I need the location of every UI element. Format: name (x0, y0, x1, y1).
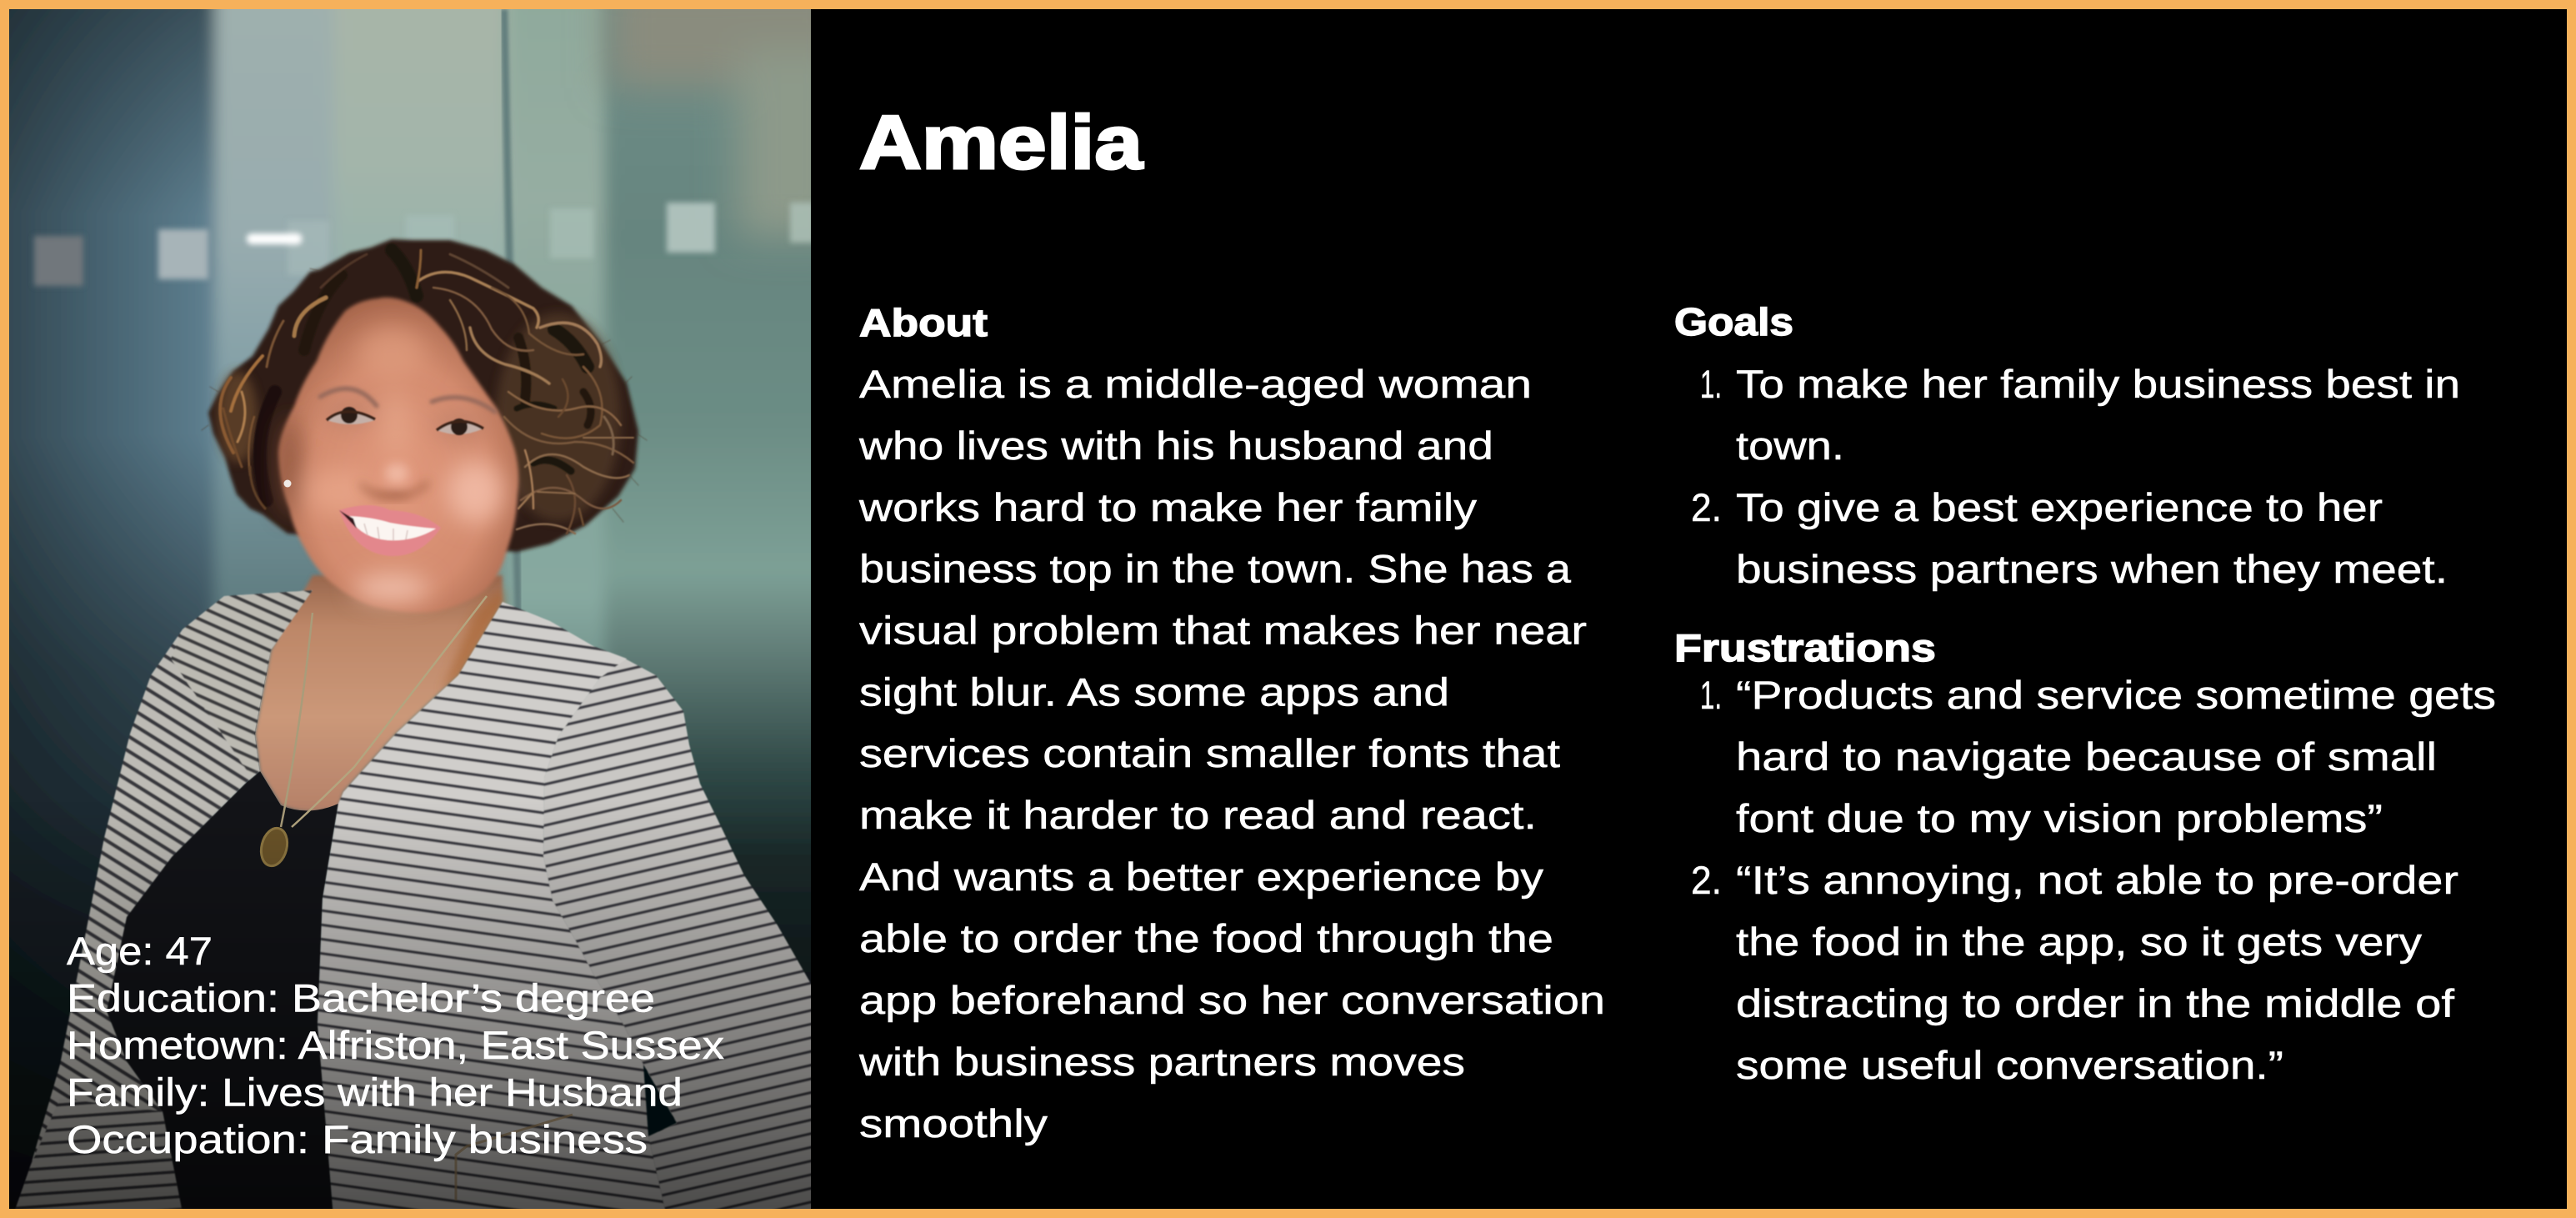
about heading: About (859, 301, 988, 344)
goal 1: To make her family business best in (1736, 362, 2460, 406)
right eye (437, 419, 483, 435)
goal 1 (1700, 362, 2460, 468)
jacket front panel (318, 602, 677, 1217)
jacket left side (32, 592, 285, 1162)
gap between arm and torso (643, 1065, 677, 1136)
demographic details on the photo: Hometown: Alfriston, East Sussex (67, 1023, 724, 1067)
about paragraph: who lives with his husband and (858, 424, 1493, 468)
frustration 1 (1700, 673, 2496, 840)
demographic details on the photo (67, 929, 724, 1161)
jacket right sleeve (543, 659, 825, 1217)
frustration 2: distracting to order in the middle of (1736, 981, 2455, 1025)
goals heading: Goals (1674, 300, 1793, 343)
demographic details on the photo: Occupation: Family business (67, 1117, 648, 1161)
demographic details on the photo: Family: Lives with her Husband (67, 1070, 683, 1114)
about paragraph: And wants a better experience by (859, 855, 1544, 899)
frustration 2: the food in the app, so it gets very (1736, 920, 2423, 964)
about paragraph: sight blur. As some apps and (859, 670, 1449, 714)
title: Amelia (859, 101, 1144, 185)
about paragraph: make it harder to read and react. (859, 793, 1537, 837)
frustration 2: some useful conversation.” (1736, 1043, 2283, 1087)
left eye (327, 407, 375, 424)
dark gradient at the bottom of the photo (9, 800, 811, 1209)
photo panel: portrait of Amelia (0, 0, 850, 1218)
glass frame line (504, 9, 518, 617)
blurred office glass background (0, 0, 838, 1218)
neck and chest skin (255, 575, 503, 812)
jacket pocket zip (456, 1115, 573, 1200)
frustration 1: “Products and service sometime gets (1736, 673, 2496, 717)
about paragraph: works hard to make her family (858, 485, 1478, 529)
jacket left collar (171, 590, 313, 775)
earring (283, 480, 292, 487)
hair curls and highlights (202, 250, 647, 534)
about paragraph: with business partners moves (858, 1040, 1465, 1084)
about paragraph: Amelia is a middle-aged woman (859, 362, 1532, 406)
soft top right wall tones (608, 0, 850, 238)
eyebrows (320, 388, 495, 412)
face highlights and shadows (280, 328, 503, 601)
nose (360, 464, 428, 498)
mouth (339, 505, 441, 556)
goal 2 (1691, 485, 2448, 591)
goal 1: town. (1736, 424, 1844, 468)
frosted glass squares (32, 199, 811, 288)
neck shadow right (442, 588, 503, 692)
face (278, 298, 518, 613)
about paragraph: app beforehand so her conversation (859, 978, 1605, 1022)
black top (107, 650, 338, 1217)
frustration 2: “It’s annoying, not able to pre-order (1736, 858, 2458, 902)
about paragraph: services contain smaller fonts that (859, 731, 1560, 775)
hair lighter right side (496, 313, 621, 521)
necklace with pendant (258, 596, 487, 869)
frustration 1: hard to navigate because of small (1736, 734, 2437, 779)
striped jacket (13, 590, 825, 1217)
hair base (208, 239, 638, 552)
frustrations section (1674, 626, 2496, 1087)
demographic details on the photo: Education: Bachelor’s degree (67, 975, 655, 1020)
goal 1: 1. (1700, 362, 1722, 406)
goal 2: To give a best experience to her (1736, 485, 2383, 529)
goal 2: business partners when they meet. (1736, 547, 2448, 591)
demographic details on the photo: Age: 47 (67, 929, 213, 973)
frustration 1: font due to my vision problems” (1736, 796, 2383, 840)
hair lighter left lobe (218, 371, 258, 463)
frustration 2 (1691, 858, 2458, 1087)
frustration 1: 1. (1700, 673, 1722, 717)
frustrations heading: Frustrations (1674, 626, 1936, 669)
goal 2: 2. (1691, 485, 1722, 529)
about paragraph: smoothly (859, 1101, 1048, 1145)
frustration 2: 2. (1691, 858, 1722, 902)
goals section (1674, 300, 2460, 591)
about paragraph (858, 362, 1605, 1145)
face base shape (278, 298, 518, 613)
black content panel (811, 9, 2567, 1209)
about paragraph: able to order the food through the (859, 916, 1553, 960)
about section (858, 301, 1605, 1145)
about paragraph: business top in the town. She has a (859, 547, 1572, 590)
jacket lower left hem (13, 1098, 183, 1217)
about paragraph: visual problem that makes her near (859, 609, 1587, 652)
